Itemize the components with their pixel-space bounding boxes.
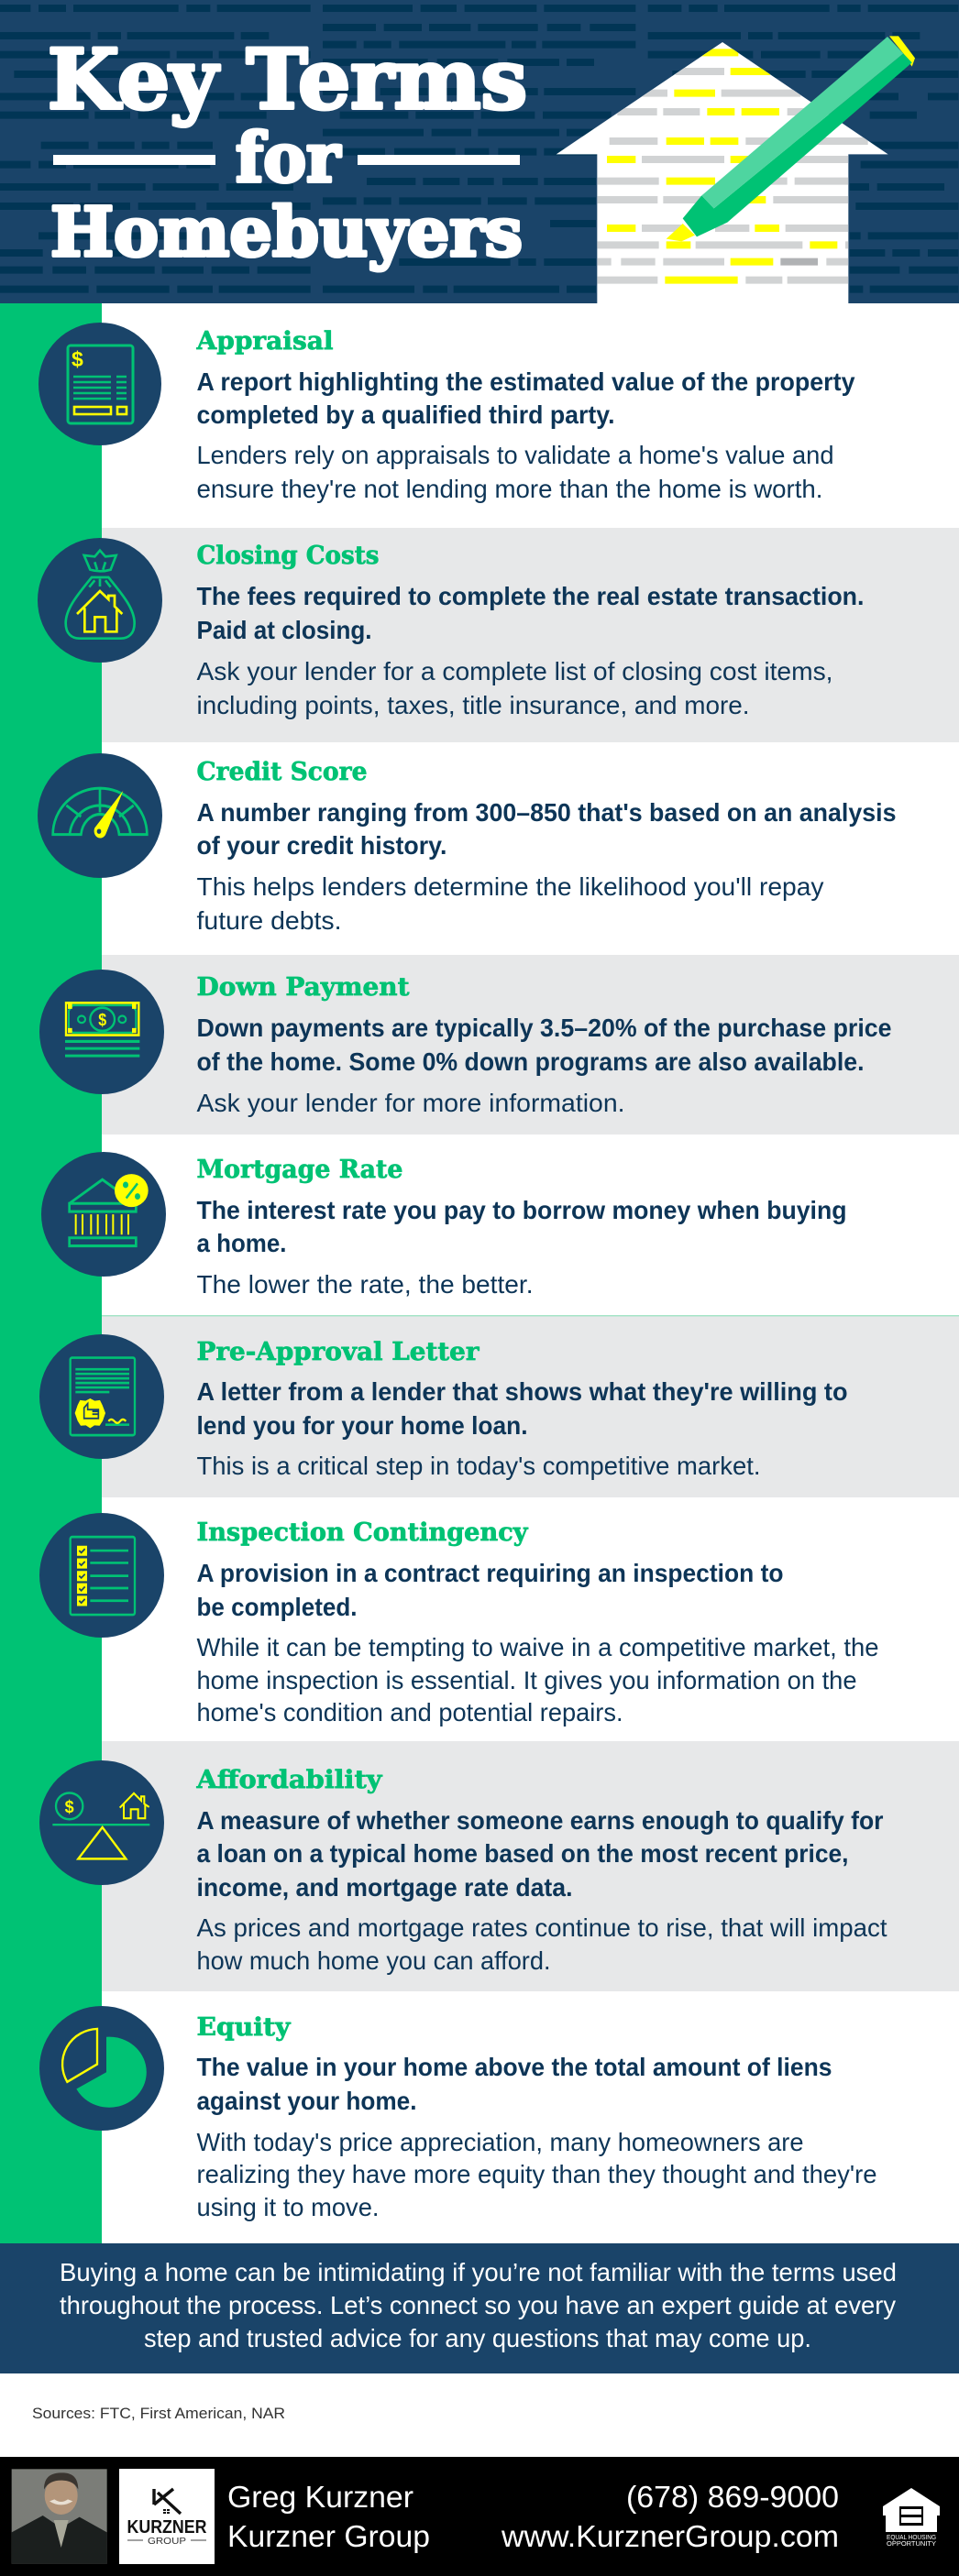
definition: pre-approval letter: lend you for your home loan. (196, 1411, 528, 1440)
detail: inspection contingency: While it can be tempting to waive in a competitive market, the (196, 1633, 878, 1661)
detail: affordability: how much home you can afford. (196, 1946, 550, 1975)
detail: appraisal: Lenders rely on appraisals to validate a home's value and (196, 441, 834, 469)
definition: closing costs (196, 582, 864, 644)
heading: inspection contingency: Inspection Contingency (196, 1518, 529, 1547)
detail: equity (196, 2128, 876, 2221)
detail: credit score (196, 872, 823, 935)
callout: closing message: throughout the process. Let’s connect so you have an expert guide at every (60, 2291, 896, 2319)
agent name: Kurzner Group (227, 2519, 430, 2553)
panel: mortgage rate (41, 1135, 959, 1315)
detail: equity: With today's price appreciation, many homeowners are (196, 2128, 803, 2156)
icon: balance scale with dollar and house (39, 1760, 164, 1885)
heading: affordability: Affordability (195, 1766, 383, 1794)
title: Key Terms (48, 31, 527, 128)
callout: closing message: step and trusted advice for any questions that may come up. (144, 2324, 811, 2352)
icon: bank with percent badge (41, 1152, 166, 1277)
definition: equity: against your home. (196, 2087, 416, 2115)
icon: house made of text with highlighter (557, 36, 915, 303)
definition: down payment (196, 1014, 891, 1076)
definition: down payment: of the home. Some 0% down programs are also available. (196, 1047, 864, 1076)
definition: affordability: A measure of whether someone earns enough to qualify for (196, 1806, 884, 1835)
detail: inspection contingency (196, 1633, 878, 1726)
definition: credit score: of your credit history. (196, 831, 447, 860)
detail: credit score: future debts. (196, 906, 341, 935)
icon: inspection checklist (39, 1513, 164, 1638)
detail: affordability: As prices and mortgage rates continue to rise, that will impact (196, 1913, 887, 1942)
icon: appraisal report (39, 323, 161, 445)
agent name: Greg Kurzner (227, 2480, 413, 2514)
definition: appraisal: completed by a qualified third party. (196, 400, 614, 429)
panel: pre-approval letter (39, 1315, 959, 1497)
heading: down payment: Down Payment (196, 973, 410, 1002)
icon: appraisal report: $ (72, 347, 83, 371)
panel: down payment (39, 955, 959, 1135)
detail: equity: using it to move. (196, 2193, 380, 2221)
panel: affordability (39, 1741, 959, 1991)
icon: equal housing opportunity: OPPORTUNITY (887, 2539, 936, 2548)
detail: appraisal: ensure they're not lending more than the home is worth. (196, 475, 823, 503)
icon: approval letter (39, 1334, 164, 1459)
definition: appraisal (196, 367, 855, 429)
icon: credit gauge (38, 753, 162, 878)
panel: closing costs (38, 528, 959, 742)
contact details: www.KurznerGroup.com (501, 2519, 839, 2553)
icon: balance scale with dollar and house: $ (65, 1796, 74, 1816)
icon: stack of cash (39, 970, 164, 1094)
heading: equity: Equity (196, 2013, 292, 2042)
contact details: (678) 869-9000 (626, 2480, 839, 2514)
definition: affordability: a loan on a typical home based on the most recent price, (196, 1839, 849, 1868)
definition: closing costs: Paid at closing. (196, 616, 372, 644)
detail: down payment: Ask your lender for more information. (196, 1089, 625, 1117)
icon: equal housing opportunity: EQUAL HOUSING (887, 2533, 936, 2541)
panel: equity (39, 1991, 959, 2243)
detail: inspection contingency: home's condition and potential repairs. (196, 1698, 623, 1726)
callout: closing message: Buying a home can be intimidating if you’re not familiar with the terms used (60, 2258, 897, 2286)
agent photo (12, 2469, 107, 2564)
panel: credit score (38, 742, 959, 955)
heading: mortgage rate: Mortgage Rate (196, 1156, 403, 1184)
company logo (119, 2469, 215, 2564)
heading: closing costs: Closing Costs (196, 542, 380, 570)
heading: pre-approval letter: Pre-Approval Letter (196, 1338, 480, 1366)
detail: affordability (196, 1913, 887, 1975)
title (48, 31, 527, 272)
icon: equity pie chart (39, 2006, 164, 2131)
detail: pre-approval letter: This is a critical step in today's competitive market. (196, 1452, 761, 1480)
detail: inspection contingency: home inspection is essential. It gives you information on the (196, 1666, 856, 1694)
agent name (227, 2480, 430, 2553)
definition: credit score (196, 798, 897, 860)
definition: affordability: income, and mortgage rate data. (196, 1873, 572, 1902)
header banner (0, 0, 959, 303)
icon: stack of cash: $ (98, 1010, 107, 1029)
sources: Sources: FTC, First American, NAR (32, 2405, 285, 2422)
definition: mortgage rate: The interest rate you pay to borrow money when buying (196, 1196, 847, 1224)
contact details (501, 2480, 839, 2553)
icon: money bag with house (38, 538, 162, 663)
detail: closing costs: including points, taxes, title insurance, and more. (196, 691, 750, 719)
panel: appraisal (39, 303, 959, 528)
definition: down payment: Down payments are typically 3.5–20% of the purchase price (196, 1014, 891, 1042)
definition: pre-approval letter: A letter from a lender that shows what they're willing to (196, 1377, 847, 1406)
heading: appraisal: Appraisal (195, 327, 334, 356)
definition: credit score: A number ranging from 300–850 that's based on an analysis (196, 798, 897, 827)
title: for (236, 119, 341, 198)
green side bar (0, 303, 102, 2243)
definition: affordability (196, 1806, 884, 1902)
definition: equity: The value in your home above the total amount of liens (196, 2053, 832, 2081)
title: Homebuyers (50, 193, 523, 272)
detail: closing costs (196, 657, 833, 719)
definition: inspection contingency (196, 1559, 783, 1621)
definition: equity (196, 2053, 832, 2115)
heading: credit score: Credit Score (196, 758, 367, 786)
definition: inspection contingency: be completed. (196, 1593, 358, 1621)
detail: mortgage rate: The lower the rate, the better. (196, 1270, 534, 1299)
detail: closing costs: Ask your lender for a complete list of closing cost items, (196, 657, 833, 685)
definition: pre-approval letter (196, 1377, 847, 1440)
icon: equal housing opportunity (883, 2488, 940, 2548)
definition: appraisal: A report highlighting the estimated value of the property (196, 367, 855, 396)
detail: appraisal (196, 441, 834, 503)
definition: inspection contingency: A provision in a contract requiring an inspection to (196, 1559, 783, 1587)
definition: mortgage rate: a home. (196, 1229, 286, 1257)
company logo: KURZNER (127, 2517, 207, 2538)
definition: mortgage rate (196, 1196, 847, 1257)
company logo: GROUP (148, 2537, 186, 2547)
detail: equity: realizing they have more equity than they thought and they're (196, 2160, 876, 2188)
callout: closing message (0, 2243, 959, 2373)
panel: inspection contingency (39, 1497, 959, 1741)
footer bar (0, 2457, 959, 2576)
definition: closing costs: The fees required to complete the real estate transaction. (196, 582, 864, 610)
detail: credit score: This helps lenders determine the likelihood you'll repay (196, 872, 823, 901)
